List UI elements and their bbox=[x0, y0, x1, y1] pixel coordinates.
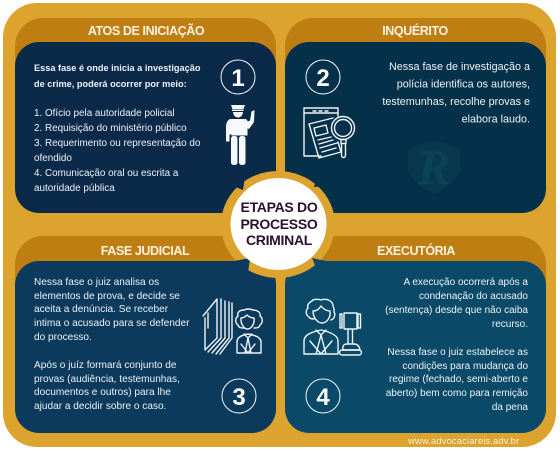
center title: CRIMINAL bbox=[246, 232, 313, 248]
panel body: fase judicial bbox=[15, 261, 276, 433]
watermark shield logo: R bbox=[416, 139, 451, 195]
description text: do processo. bbox=[34, 332, 92, 343]
number 1 badge: 1 bbox=[231, 65, 245, 92]
ring notch bottom left bbox=[234, 258, 250, 276]
center badge: etapas do processo criminal bbox=[221, 171, 335, 278]
description text: da pena bbox=[492, 402, 528, 413]
header band: executória bbox=[285, 236, 546, 300]
panel body: atos de iniciação bbox=[15, 42, 276, 213]
gold ring bbox=[221, 171, 335, 278]
description text: Nessa fase o juiz estabelece as bbox=[387, 347, 528, 358]
description text: aberto) bem como para remição bbox=[386, 388, 528, 399]
description text: A execução ocorrerá após a bbox=[403, 277, 528, 288]
center title: ETAPAS DO bbox=[241, 199, 318, 215]
number 3 badge: 3 bbox=[232, 384, 246, 411]
ring notch top left bbox=[232, 172, 245, 190]
description text: elementos de prova, e decide se bbox=[34, 291, 180, 302]
description text: Nessa fase o juiz analisa os bbox=[34, 277, 159, 288]
heading: inquérito: INQUÉRITO bbox=[382, 23, 448, 38]
header band: fase judicial bbox=[15, 236, 276, 300]
numbered list: 3. Requerimento ou representação do bbox=[34, 138, 201, 149]
header band: atos de iniciação bbox=[15, 18, 276, 80]
number 4 badge bbox=[306, 379, 340, 413]
number 2 badge: 2 bbox=[316, 65, 330, 92]
description text: documentos e outros) para lhe bbox=[34, 387, 171, 398]
ring notch bottom right bbox=[312, 258, 328, 276]
description text: ajudar a decidir sobre o caso. bbox=[34, 401, 166, 412]
numbered list: 2. Requisição do ministério público bbox=[34, 123, 187, 134]
description text: condenação do acusado bbox=[419, 291, 528, 302]
description text: Nessa fase de investigação a bbox=[389, 61, 530, 73]
number 3 badge bbox=[222, 379, 256, 413]
heading: atos de iniciação: ATOS DE INICIAÇÃO bbox=[88, 23, 205, 38]
heading: executória: EXECUTÓRIA bbox=[377, 243, 455, 258]
numbered list: 1. Ofício pela autoridade policial bbox=[34, 108, 175, 119]
intro text: de crime, poderá ocorrer por meio: bbox=[34, 79, 187, 89]
description text: recurso. bbox=[492, 319, 528, 330]
icon: police officer bbox=[226, 105, 254, 165]
description text: elabora laudo. bbox=[462, 114, 530, 126]
number 1 badge bbox=[221, 60, 255, 94]
icon: judge and gavel bbox=[304, 299, 362, 355]
panel: fase judicial bbox=[15, 236, 276, 433]
white circle bbox=[230, 178, 326, 270]
numbered list: autoridade pública bbox=[34, 183, 115, 194]
description text: (sentença) desde que não caiba bbox=[385, 305, 528, 316]
icon: documents and magnifier bbox=[304, 108, 354, 158]
description text: provas (audiência, testemunhas, bbox=[34, 374, 180, 385]
heading: fase judicial: FASE JUDICIAL bbox=[101, 244, 190, 258]
panel body: executória bbox=[285, 261, 546, 433]
number 2 badge bbox=[306, 60, 340, 94]
intro text: Essa fase é onde inicia a investigação bbox=[34, 63, 201, 73]
numbered list: ofendido bbox=[34, 153, 72, 164]
panel body: inquérito bbox=[285, 42, 546, 213]
description text: intima o acusado para se defender bbox=[34, 318, 190, 329]
panel: executória bbox=[285, 236, 546, 446]
center title: PROCESSO bbox=[241, 216, 318, 232]
icon: case files and judge bbox=[203, 299, 262, 354]
panel: atos de iniciação bbox=[15, 18, 276, 213]
description text: condições para mudança do bbox=[402, 361, 528, 372]
panel: inquérito bbox=[285, 18, 546, 213]
description text: polícia identifica os autores, bbox=[397, 78, 530, 90]
number 4 badge: 4 bbox=[316, 384, 330, 411]
description text: aceita a denúncia. Se receber bbox=[34, 304, 169, 315]
description text: testemunhas, recolhe provas e bbox=[382, 96, 530, 108]
watermark shield logo bbox=[408, 139, 460, 195]
description text: regime (fechado, semi-aberto e bbox=[389, 374, 528, 385]
ring notch top right bbox=[314, 171, 328, 187]
numbered list: 4. Comunicação oral ou escrita a bbox=[34, 168, 179, 179]
header band: inquérito bbox=[285, 18, 546, 80]
description text: Após o juíz formará conjunto de bbox=[34, 360, 177, 371]
website footer: www.advocaciareis.adv.br bbox=[407, 435, 519, 446]
